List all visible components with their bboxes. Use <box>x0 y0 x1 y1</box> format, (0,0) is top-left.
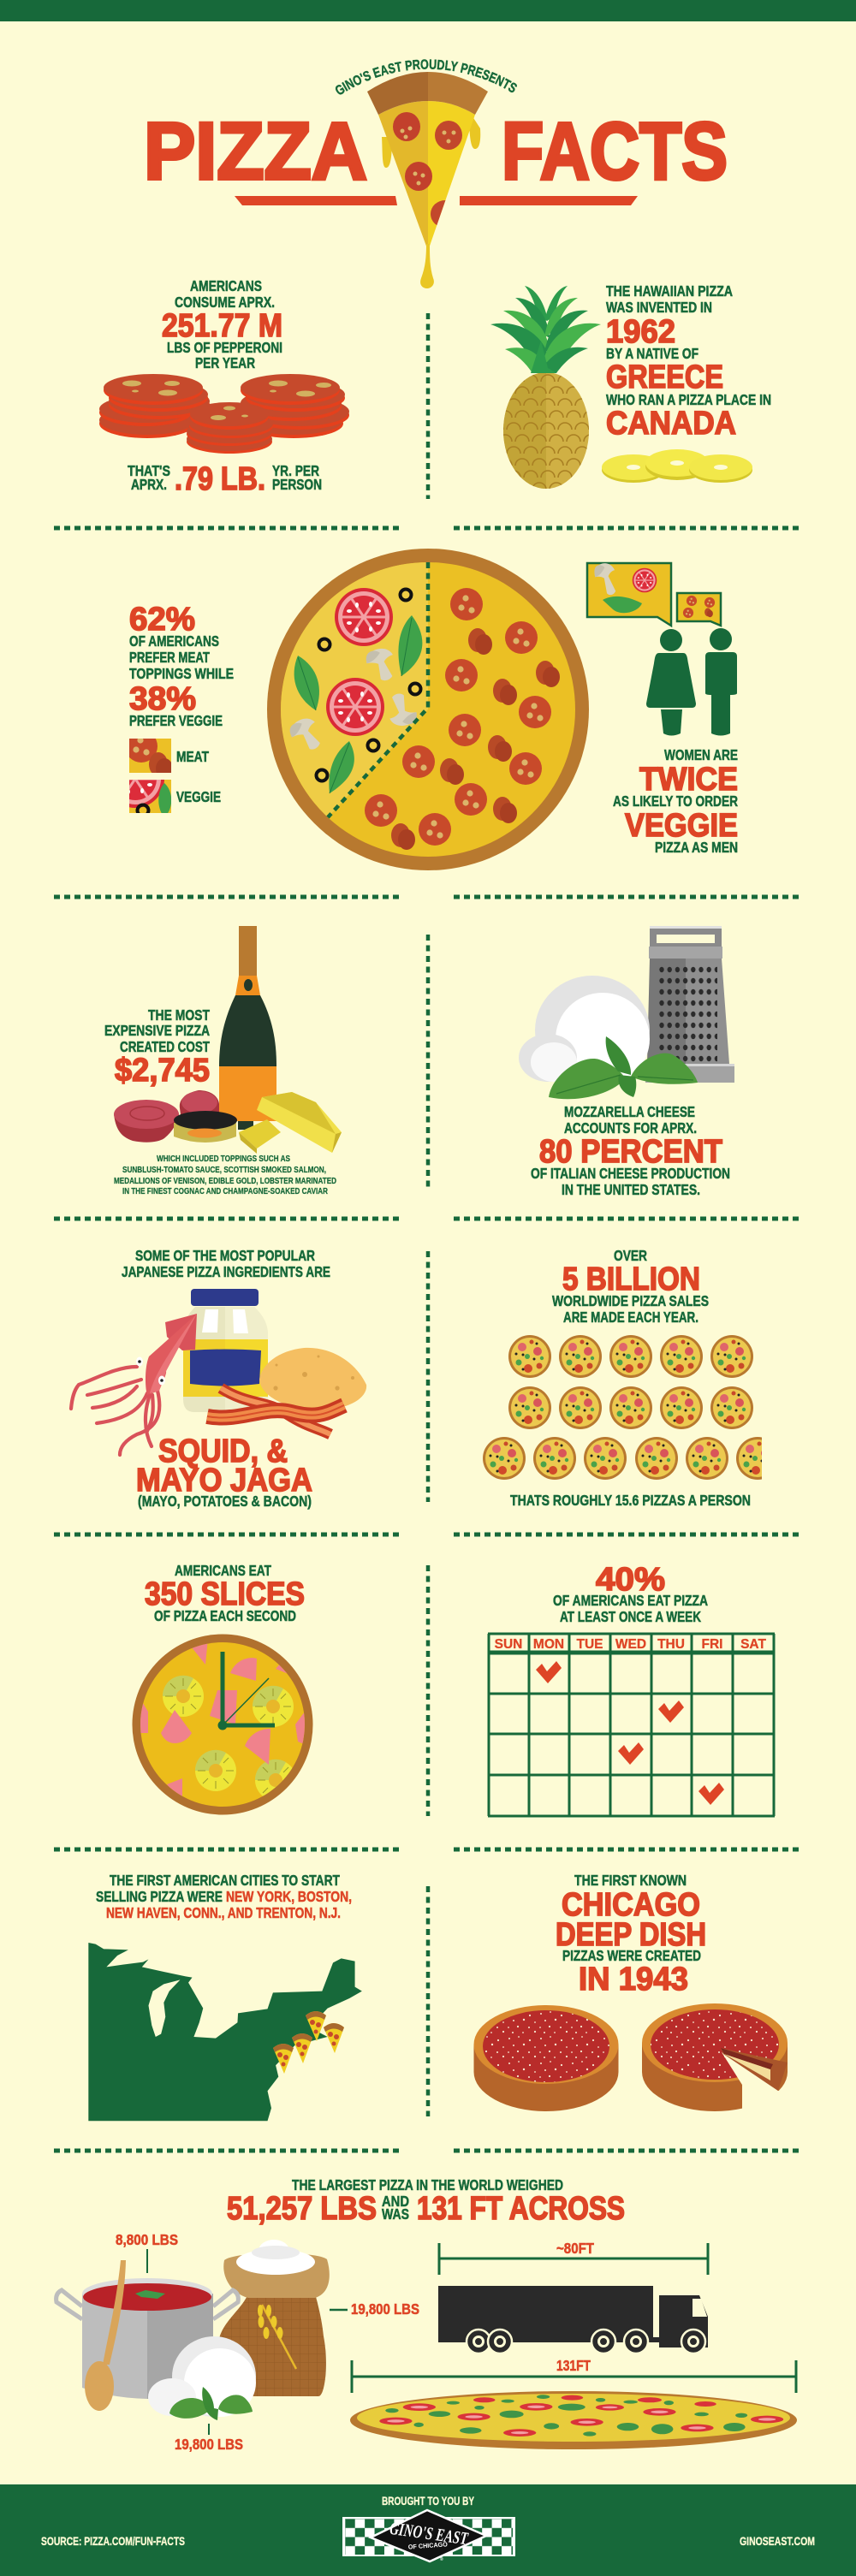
text: largest pizza heading: WAS <box>382 2205 409 2223</box>
legend: meat: MEAT <box>176 748 209 765</box>
text: pepperoni intro: CONSUME APRX. <box>175 294 275 311</box>
legend: meat <box>129 739 209 773</box>
logo: gino's east <box>342 2510 515 2562</box>
text: largest pizza heading <box>227 2176 625 2227</box>
text: 40 percent: OF AMERICANS EAT PIZZA <box>553 1592 708 1609</box>
panel: first american cities <box>88 1872 362 2121</box>
icon: whole deep dish pizza <box>474 2005 618 2111</box>
text: sales intro <box>552 1247 709 1326</box>
measure: truck length <box>439 2240 708 2275</box>
text: per person callout: THAT'S <box>128 462 170 479</box>
text: first cities: THE FIRST AMERICAN CITIES TO START <box>110 1872 340 1889</box>
veggie toppings <box>287 588 422 793</box>
text: first cities: SELLING PIZZA WERE <box>96 1888 223 1905</box>
icon grid: pizzas <box>483 1335 779 1480</box>
text: 350 slices: OF PIZZA EACH SECOND <box>154 1607 296 1624</box>
icon: giant pizza <box>350 2391 797 2449</box>
icon: sauce pot with spoon <box>56 2260 238 2411</box>
icon: pizza clock <box>132 1635 313 1814</box>
text: squid and mayo jaga: SQUID, & <box>158 1433 288 1469</box>
text: deep dish: DEEP DISH <box>556 1917 706 1953</box>
panel: weekly calendar <box>488 1562 775 1816</box>
icons: pizza slice markers <box>273 2011 344 2074</box>
icon: truck <box>438 2286 708 2353</box>
icon: pineapple rings <box>602 449 752 483</box>
text: pepperoni intro: PER YEAR <box>195 354 255 371</box>
icon: speech bubbles <box>587 561 721 626</box>
text: squid and mayo jaga <box>136 1433 312 1510</box>
label: sauce weight <box>116 2231 178 2273</box>
label: flour weight <box>330 2300 419 2318</box>
text: per person callout: APRX. <box>131 476 167 493</box>
text: largest pizza heading: 131 FT ACROSS <box>417 2191 625 2227</box>
text: per person callout: YR. PER <box>272 462 319 479</box>
meat toppings <box>365 588 560 850</box>
legend: veggie <box>129 780 221 813</box>
label: cheese weight <box>175 2424 243 2453</box>
text: hawaiian pizza facts: CANADA <box>606 406 736 442</box>
text: deep dish: PIZZAS WERE CREATED <box>562 1947 701 1964</box>
text: japanese intro: JAPANESE PIZZA INGREDIENTS ARE <box>122 1263 330 1280</box>
icon: mayo jar <box>183 1289 268 1412</box>
text: 40 percent: 40% <box>596 1562 665 1598</box>
text: largest pizza heading: AND <box>382 2193 409 2210</box>
icon: potato <box>259 1348 366 1410</box>
chart: calendar grid: THU <box>657 1637 685 1652</box>
map: northeastern united states <box>88 1943 362 2121</box>
text: pepperoni intro <box>162 277 282 371</box>
curved presenter line: GINO'S EAST PROUDLY PRESENTS <box>336 59 517 94</box>
icon: pepperoni stacks <box>99 374 349 454</box>
text: mozzarella fact: IN THE UNITED STATES. <box>562 1181 700 1198</box>
text: mozzarella fact: 80 PERCENT <box>539 1134 722 1170</box>
icon: squid <box>71 1314 197 1455</box>
text: hawaiian pizza facts: 1962 <box>606 314 675 350</box>
heading: PIZZA: PIZZA <box>144 106 367 197</box>
icon: venison medallions <box>114 1090 219 1143</box>
text: preference stats: TOPPINGS WHILE <box>129 665 234 682</box>
chart: calendar grid <box>488 1634 775 1816</box>
icon: deep dish pizza with slice removed <box>642 2003 796 2117</box>
text: first cities: NEW YORK, BOSTON, <box>226 1888 352 1905</box>
text: most expensive price: EXPENSIVE PIZZA <box>104 1022 210 1039</box>
text: women twice as likely: TWICE <box>639 762 738 798</box>
text: brought to you by: BROUGHT TO YOU BY <box>382 2494 474 2508</box>
icon: gold bars <box>239 1092 342 1154</box>
legend: veggie: VEGGIE <box>176 788 221 805</box>
underline bars <box>235 196 638 205</box>
footer band <box>0 2484 856 2576</box>
text: toppings list: WHICH INCLUDED TOPPINGS SUCH AS <box>157 1154 290 1164</box>
title block <box>144 59 728 288</box>
text: japanese intro <box>122 1247 330 1280</box>
text: largest pizza heading: 51,257 LBS <box>227 2191 377 2227</box>
logo: gino's east: OF CHICAGO <box>408 2540 448 2551</box>
checkmarks <box>536 1661 724 1805</box>
top green header bar <box>0 0 856 21</box>
text: deep dish: IN 1943 <box>579 1962 688 1997</box>
text: 40 percent <box>553 1562 708 1625</box>
label: sauce weight: 8,800 LBS <box>116 2231 178 2248</box>
text: most expensive price: CREATED COST <box>120 1038 210 1055</box>
text: pepperoni intro: AMERICANS <box>190 277 262 294</box>
text: toppings list: SUNBLUSH-TOMATO SAUCE, SCOTTISH SMOKED SALMON, <box>122 1165 326 1175</box>
text: per person callout: .79 LB. <box>175 461 265 497</box>
logo: gino's east: ® <box>440 2556 443 2562</box>
measure: truck length: ~80FT <box>556 2240 594 2257</box>
icon: bacon <box>207 1388 344 1434</box>
text: deep dish <box>556 1872 706 1997</box>
chart: calendar grid: MON <box>533 1637 564 1652</box>
text: most expensive price <box>104 1006 210 1089</box>
panel: japanese pizza <box>71 1247 366 1510</box>
text: hawaiian pizza facts: BY A NATIVE OF <box>606 345 698 362</box>
text: sales intro: WORLDWIDE PIZZA SALES <box>552 1292 709 1309</box>
text: mozzarella fact: ACCOUNTS FOR APRX. <box>564 1119 697 1137</box>
text: women twice as likely: AS LIKELY TO ORDER <box>613 792 738 810</box>
icon: flour sack <box>218 2240 330 2396</box>
text: preference stats: PREFER MEAT <box>129 649 210 666</box>
panel: chicago deep dish <box>474 1872 796 2117</box>
text: per person callout <box>128 461 322 497</box>
text: hawaiian pizza facts: THE HAWAIIAN PIZZA <box>606 282 733 300</box>
text: hawaiian pizza facts: GREECE <box>606 359 723 395</box>
icon: caviar tin <box>174 1111 237 1143</box>
chart: calendar grid: SAT <box>740 1637 766 1652</box>
chart: calendar grid: SUN <box>495 1637 522 1652</box>
icon: champagne bottle <box>219 926 276 1130</box>
text: mozzarella fact <box>531 1103 730 1198</box>
text: hawaiian pizza facts: WAS INVENTED IN <box>606 299 712 316</box>
text: most expensive price: $2,745 <box>115 1053 210 1089</box>
icon: pineapple <box>490 286 601 491</box>
text: mozzarella fact: OF ITALIAN CHEESE PRODUCTION <box>531 1165 730 1182</box>
text: women twice as likely: VEGGIE <box>625 808 738 844</box>
text: per person: THATS ROUGHLY 15.6 PIZZAS A PERSON <box>510 1492 751 1509</box>
text: toppings list: IN THE FINEST COGNAC AND CHAMPAGNE-SOAKED CAVIAR <box>122 1186 328 1196</box>
panel: mozzarella <box>519 926 734 1198</box>
text: women twice as likely <box>613 746 738 856</box>
text: website: GINOSEAST.COM <box>740 2534 815 2548</box>
text: source: SOURCE: PIZZA.COM/FUN-FACTS <box>41 2534 185 2548</box>
text: first cities: NEW HAVEN, CONN., AND TRENTON, N.J. <box>106 1904 341 1921</box>
panel: most expensive pizza <box>104 926 342 1196</box>
text: 350 slices <box>145 1562 305 1624</box>
text: pepperoni intro: LBS OF PEPPERONI <box>167 339 282 356</box>
text: hawaiian pizza facts <box>606 282 771 442</box>
text: women twice as likely: WOMEN ARE <box>664 746 738 763</box>
panel: 5 billion pizzas <box>483 1247 779 1509</box>
panel: slices each second <box>132 1562 313 1814</box>
icon: pizza slice <box>367 72 488 288</box>
chart: calendar grid: FRI <box>702 1637 722 1652</box>
text: pepperoni intro: 251.77 M <box>162 308 282 344</box>
text: 40 percent: AT LEAST ONCE A WEEK <box>560 1608 701 1625</box>
text: preference stats: PREFER VEGGIE <box>129 712 223 729</box>
text: sales intro: OVER <box>614 1247 647 1264</box>
logo: gino's east: GINO'S EAST <box>389 2518 470 2549</box>
text: squid and mayo jaga: (MAYO, POTATOES & BACON) <box>138 1493 312 1510</box>
text: preference stats: 62% <box>129 602 195 638</box>
chart: calendar grid: WED <box>615 1637 646 1652</box>
panel: largest pizza <box>56 2176 797 2453</box>
icon: basil leaves <box>549 1036 698 1099</box>
panel: hawaiian pizza <box>490 282 771 491</box>
text: most expensive price: THE MOST <box>148 1006 210 1024</box>
label: flour weight: 19,800 LBS <box>351 2300 419 2318</box>
chart: pizza split into meat and veggie halves <box>267 549 589 870</box>
text: first cities <box>96 1872 352 1921</box>
icon: cheese grater <box>645 926 734 1083</box>
text: toppings list: MEDALLIONS OF VENISON, EDIBLE GOLD, LOBSTER MARINATED <box>114 1176 336 1186</box>
chart: calendar grid: TUE <box>577 1637 603 1652</box>
text: squid and mayo jaga: MAYO JAGA <box>136 1463 312 1499</box>
panel: meat versus veggie <box>106 549 738 870</box>
text: 350 slices: AMERICANS EAT <box>175 1562 271 1579</box>
text: preference stats: 38% <box>129 681 196 717</box>
text: per person callout: PERSON <box>272 476 322 493</box>
text: sales intro: ARE MADE EACH YEAR. <box>563 1309 698 1326</box>
text: mozzarella fact: MOZZARELLA CHEESE <box>564 1103 695 1120</box>
icon: mozzarella balls <box>519 976 650 1085</box>
panel: pepperoni <box>99 277 349 497</box>
text: toppings list <box>114 1154 336 1196</box>
text: deep dish: CHICAGO <box>562 1887 700 1923</box>
text: largest pizza heading: THE LARGEST PIZZA IN THE WORLD WEIGHED <box>292 2176 563 2193</box>
text: preference stats <box>129 602 234 729</box>
text: 350 slices: 350 SLICES <box>145 1576 305 1612</box>
measure: pizza diameter: 131FT <box>556 2357 591 2374</box>
heading: FACTS: FACTS <box>502 106 728 197</box>
text: hawaiian pizza facts: WHO RAN A PIZZA PLACE IN <box>606 391 771 408</box>
text: deep dish: THE FIRST KNOWN <box>574 1872 687 1889</box>
measure: pizza diameter <box>352 2357 796 2393</box>
icon: mozzarella and basil <box>148 2336 256 2420</box>
text: sales intro: 5 BILLION <box>562 1261 700 1297</box>
icon: woman and man <box>646 628 737 736</box>
text: women twice as likely: PIZZA AS MEN <box>655 839 738 856</box>
text: preference stats: OF AMERICANS <box>129 632 219 650</box>
text: japanese intro: SOME OF THE MOST POPULAR <box>135 1247 315 1264</box>
label: cheese weight: 19,800 LBS <box>175 2436 243 2453</box>
